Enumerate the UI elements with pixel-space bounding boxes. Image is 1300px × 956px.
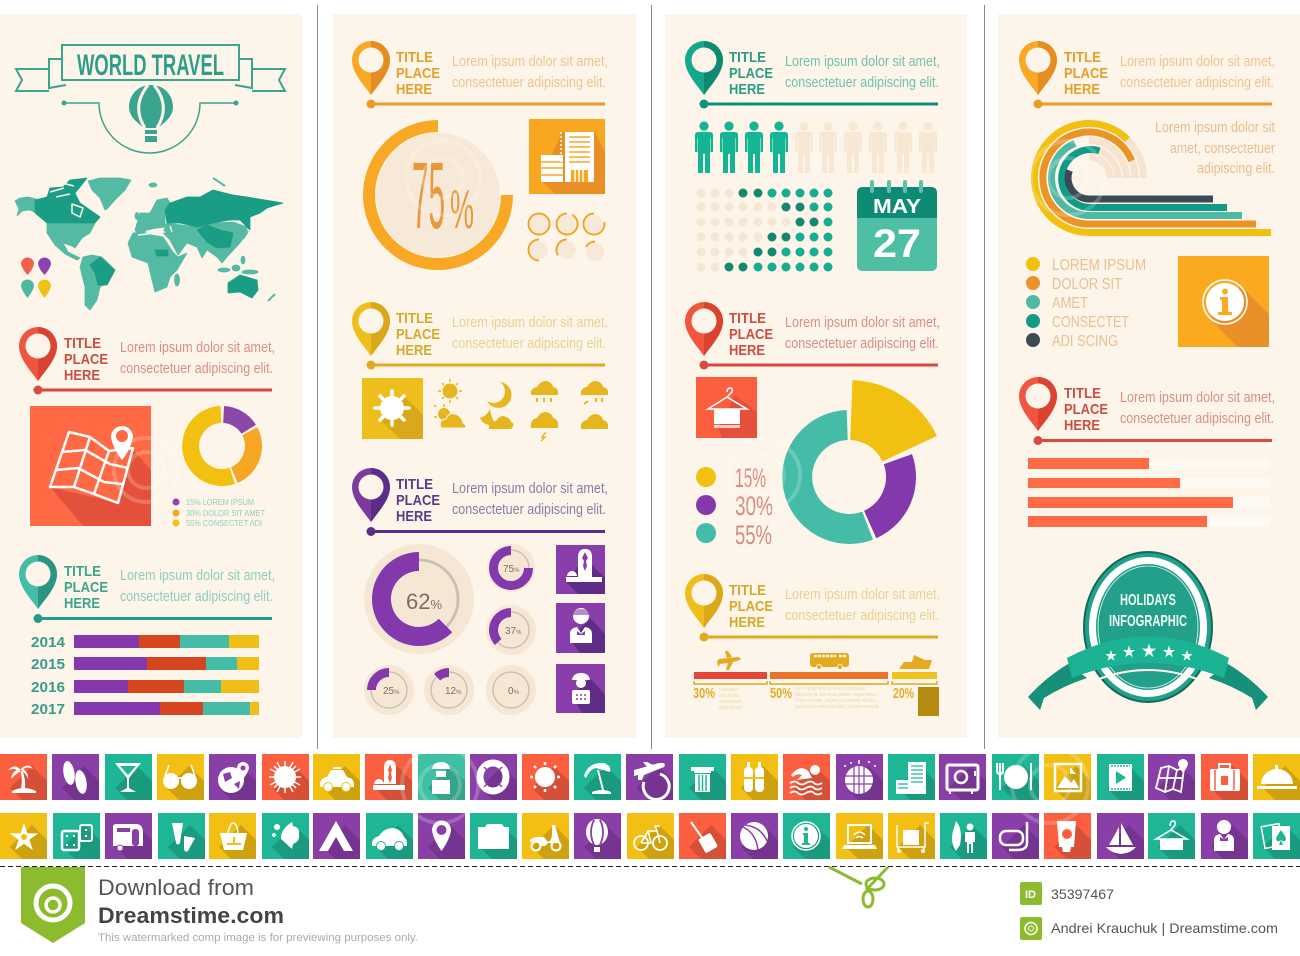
- icon: plane loop: [626, 754, 673, 800]
- text block: right aligned: adipiscing elit.: [1197, 160, 1275, 177]
- transport share chart: 50%: [770, 685, 792, 702]
- icon: ship: [899, 655, 932, 669]
- icon: map: [1148, 754, 1195, 800]
- donut: 37%: 37%: [505, 626, 522, 637]
- header: teal title: HERE: [729, 81, 765, 98]
- icon: beach bag: [209, 813, 256, 859]
- legend: radial chart: CONSECTET: [1052, 314, 1129, 331]
- icon: globe with pin: [209, 754, 256, 800]
- icon: palm island: [0, 754, 47, 800]
- header: orange title: consectetuer adipiscing elit.: [452, 74, 606, 91]
- icon: car: [366, 813, 413, 859]
- text block: right aligned: Lorem ipsum dolor sit: [1155, 119, 1276, 136]
- icon: bicycle: [627, 813, 674, 859]
- icon: playing cards: [1253, 813, 1300, 859]
- donut chart: map: [191, 414, 253, 477]
- header: red title: consectetuer adipiscing elit.: [1120, 410, 1274, 427]
- transport share chart: purus lectus malesuada libero, sit amet commodo: [795, 704, 879, 710]
- header: teal title: Lorem ipsum dolor sit amet,: [120, 567, 275, 584]
- header: teal title: [19, 555, 275, 623]
- icon: plate and cutlery: [992, 754, 1039, 800]
- icon: info tile: [1178, 256, 1269, 347]
- world map: [15, 178, 283, 310]
- icon: flippers: [158, 813, 205, 859]
- header: teal title: PLACE: [64, 579, 108, 596]
- icon: suitcase: [1201, 754, 1248, 800]
- donut legend: 15% LOREM IPSUM: [186, 498, 254, 507]
- footer: download banner: Dreamstime.com: [98, 903, 284, 928]
- header: red title: HERE: [1064, 417, 1100, 434]
- icon: bus: [810, 653, 849, 670]
- header: teal title: consectetuer adipiscing elit.: [120, 588, 273, 605]
- stacked bar chart: years: 2014: [31, 634, 66, 651]
- dot matrix chart: [696, 188, 832, 272]
- header: red title: HERE: [64, 367, 100, 384]
- panel: statistics and badge: [998, 14, 1300, 738]
- header: yellow title: PLACE: [729, 598, 773, 615]
- donut: 37%: [486, 605, 536, 655]
- legend: percentages: 30%: [735, 491, 773, 521]
- header: teal title: PLACE: [729, 65, 773, 82]
- footer: image id: ID: [1025, 889, 1036, 901]
- footer: author credit: Andrei Krauchuk | Dreamstime.com: [1051, 920, 1278, 936]
- icon: camera: [470, 813, 517, 859]
- header: red title: PLACE: [729, 326, 773, 343]
- header: orange title: TITLE: [1064, 49, 1101, 66]
- icon: picture: [1044, 754, 1091, 800]
- transport share chart: Lorem ipsum dolor sit amet, consectetuer: [795, 686, 865, 692]
- icon: info: [783, 813, 830, 859]
- panel: world travel: [0, 14, 302, 738]
- badge: holidays infographic: HOLIDAYS: [1120, 592, 1176, 609]
- icon: column: [679, 754, 726, 800]
- icon: tent: [313, 813, 360, 859]
- legend pins: [21, 258, 51, 298]
- icon: cloche: [1253, 754, 1300, 800]
- donut: 62%: 62%: [406, 589, 442, 614]
- header: orange title: Lorem ipsum dolor sit amet,: [452, 53, 608, 70]
- icon: film: [1097, 754, 1144, 800]
- donut: 62%: [364, 544, 474, 654]
- icon: receptionist: [365, 754, 412, 800]
- badge: holidays infographic: [1028, 551, 1268, 710]
- donut: 75%: 75%: [503, 564, 520, 575]
- text block: right aligned: [1155, 119, 1276, 177]
- donut: 75%: [487, 544, 535, 592]
- header: yellow title: PLACE: [396, 326, 440, 343]
- footer: download banner: This watermarked comp image is for previewing purposes only.: [98, 932, 418, 944]
- donut: 12%: [424, 665, 474, 715]
- header: red title: HERE: [729, 342, 765, 359]
- donut: 12%: 12%: [445, 686, 462, 697]
- transport share chart: 30%: [693, 685, 715, 702]
- panel: hotels and weather: [333, 14, 636, 738]
- donut legend: 55% CONSECTET ADI: [186, 519, 262, 528]
- legend: radial chart: DOLOR SIT: [1052, 276, 1122, 293]
- header: yellow title: Lorem ipsum dolor sit amet,: [785, 586, 940, 603]
- icon: towel hanger: [1148, 813, 1195, 859]
- header: red title: PLACE: [1064, 401, 1108, 418]
- icon: starfish: [0, 813, 47, 859]
- icon: fish: [262, 813, 309, 859]
- icon: towel hanger tile: [696, 377, 757, 438]
- icon: swimmer: [783, 754, 830, 800]
- small progress rings: [528, 213, 604, 261]
- stacked bar chart: years: 2016: [31, 679, 65, 696]
- header: orange title: [352, 41, 608, 108]
- calendar: May 27: 27: [873, 222, 921, 266]
- icon: sun burst: [262, 754, 309, 800]
- icon: plane: [717, 651, 741, 670]
- header: purple title: consectetuer adipiscing elit.: [452, 501, 606, 518]
- icon strip: row 2: [0, 813, 1300, 859]
- donut legend: [172, 498, 265, 528]
- header: yellow title: Lorem ipsum dolor sit amet,: [452, 314, 608, 331]
- icon: buildings tile: [529, 119, 605, 194]
- icon: maid: [418, 754, 465, 800]
- header: red title: [1019, 377, 1275, 445]
- header: purple title: Lorem ipsum dolor sit amet,: [452, 480, 608, 497]
- badge: holidays infographic: INFOGRAPHIC: [1109, 613, 1187, 630]
- text block: right aligned: amet, consectetuer: [1170, 140, 1275, 157]
- icon: folded map tile: [30, 406, 151, 526]
- calendar: May 27: [857, 180, 937, 271]
- people pictogram: [695, 122, 937, 173]
- transport share chart: [693, 651, 939, 716]
- icon: diving mask: [992, 813, 1039, 859]
- icon: laptop: [836, 813, 883, 859]
- header: yellow title: HERE: [729, 614, 765, 631]
- header: purple title: TITLE: [396, 476, 433, 493]
- header: red title: TITLE: [729, 310, 766, 327]
- legend: radial chart: [1026, 257, 1146, 350]
- icon: safe: [939, 754, 986, 800]
- icon: maid tile: [556, 664, 605, 713]
- legend: radial chart: LOREM IPSUM: [1052, 257, 1146, 274]
- icon: flip flops: [52, 754, 99, 800]
- progress ring: 75%: 75: [412, 143, 445, 249]
- icon: balloon: [574, 813, 621, 859]
- legend: percentages: 15%: [735, 463, 766, 493]
- legend: radial chart: ADI SCING: [1052, 333, 1118, 350]
- icon: disco ball: [836, 754, 883, 800]
- header: orange title: PLACE: [396, 65, 440, 82]
- exploded donut chart: [782, 380, 937, 544]
- header: red title: [685, 302, 940, 370]
- header: orange title: PLACE: [1064, 65, 1108, 82]
- title banner: world travel: WORLD TRAVEL: [77, 49, 224, 82]
- icon: dice: [53, 813, 100, 859]
- footer: image id: [1020, 882, 1114, 905]
- icon: buildings: [888, 754, 935, 800]
- icon: location pin: [418, 813, 465, 859]
- stacked bar chart: years: [31, 634, 259, 718]
- transport share chart: Lorem ipsum: [719, 687, 739, 693]
- header: orange title: TITLE: [396, 49, 433, 66]
- legend: radial chart: AMET: [1052, 295, 1088, 312]
- icon: scooter: [522, 813, 569, 859]
- stacked bar chart: years: 2017: [31, 701, 65, 718]
- header: purple title: [352, 468, 608, 536]
- footer: image id: 35397467: [1051, 886, 1114, 902]
- icon: sunglasses: [157, 754, 204, 800]
- icon: scissors: [829, 867, 888, 907]
- donut legend: 30% DOLOR SIT AMET: [186, 509, 265, 518]
- header: orange title: [1019, 41, 1275, 108]
- icon: luggage trolley: [888, 813, 935, 859]
- icon: cocktail: [105, 754, 152, 800]
- icon: sun: [522, 754, 569, 800]
- header: yellow title: consectetuer adipiscing elit.: [452, 335, 606, 352]
- icon: dreamstime ribbon: [21, 867, 85, 943]
- header: red title: TITLE: [64, 335, 101, 352]
- donut: 25%: 25%: [383, 686, 400, 697]
- donut: 25%: [364, 665, 414, 715]
- header: orange title: HERE: [1064, 81, 1100, 98]
- transport share chart: Fusce posuere, magna sed pulvinar ultricies,: [795, 698, 877, 704]
- header: red title: TITLE: [1064, 385, 1101, 402]
- icon: taxi: [313, 754, 360, 800]
- header: teal title: Lorem ipsum dolor sit amet,: [785, 53, 940, 70]
- progress ring: 75%: %: [450, 178, 474, 240]
- icon: luggage: [679, 813, 726, 859]
- header: yellow title: [352, 302, 608, 370]
- legend: percentages: 55%: [735, 520, 772, 550]
- icon: waiter tile: [556, 603, 605, 653]
- header: orange title: Lorem ipsum dolor sit amet,: [1120, 53, 1275, 70]
- icon strip: row 1: [0, 754, 1300, 800]
- icon: waiter: [1201, 813, 1248, 859]
- calendar: May 27: MAY: [873, 196, 922, 218]
- donut: 0%: [486, 665, 536, 715]
- icon: receptionist tile: [556, 545, 605, 594]
- icon: beach ball: [731, 813, 778, 859]
- icon: sailboat: [1097, 813, 1144, 859]
- header: red title: consectetuer adipiscing elit.: [785, 335, 939, 352]
- transport share chart: 20%: [893, 685, 914, 702]
- header: purple title: PLACE: [396, 492, 440, 509]
- icon: sun tile: [362, 378, 423, 439]
- header: orange title: consectetuer adipiscing elit.: [1120, 74, 1274, 91]
- header: teal title: HERE: [64, 595, 100, 612]
- footer: author credit: [1020, 917, 1278, 940]
- legend: percentages: [696, 463, 773, 550]
- icon: sunscreen: [1044, 813, 1091, 859]
- title banner: world travel: [16, 45, 285, 91]
- header: yellow title: consectetuer adipiscing elit.: [785, 607, 939, 624]
- header: yellow title: [685, 574, 940, 642]
- header: orange title: HERE: [396, 81, 432, 98]
- progress ring: 75%: [369, 126, 507, 264]
- transport share chart: dolor sit amet: [719, 693, 739, 699]
- icon: beach umbrella: [574, 754, 621, 800]
- transport share chart: adipiscing elit. Maecenas porttitor congue massa.: [795, 692, 877, 698]
- icon: balloon emblem: [62, 85, 238, 153]
- icon: scuba tanks: [731, 754, 778, 800]
- header: yellow title: HERE: [396, 342, 432, 359]
- header: purple title: HERE: [396, 508, 432, 525]
- transport share chart: consectetuer: [719, 699, 741, 705]
- transport share chart: adipiscing elit: [719, 705, 741, 711]
- footer: download banner: [21, 867, 418, 944]
- donut: 0%: 0%: [508, 686, 520, 697]
- radial bar chart: [1034, 124, 1271, 233]
- icon: surfer: [940, 813, 987, 859]
- header: teal title: consectetuer adipiscing elit.: [785, 74, 939, 91]
- header: red title: PLACE: [64, 351, 108, 368]
- icon: caravan: [105, 813, 152, 859]
- horizontal bar chart: [1028, 458, 1270, 527]
- header: teal title: [685, 41, 940, 108]
- header: red title: Lorem ipsum dolor sit amet,: [1120, 389, 1275, 406]
- icon: lifebuoy: [470, 754, 517, 800]
- header: teal title: TITLE: [64, 563, 101, 580]
- header: yellow title: TITLE: [729, 582, 766, 599]
- header: yellow title: TITLE: [396, 310, 433, 327]
- header: red title: [19, 327, 275, 394]
- header: red title: consectetuer adipiscing elit.: [120, 360, 273, 377]
- panel: people and transport: [665, 14, 967, 738]
- header: red title: Lorem ipsum dolor sit amet,: [785, 314, 940, 331]
- stacked bar chart: years: 2015: [31, 656, 65, 673]
- weather icons: [434, 379, 608, 441]
- footer: download banner: Download from: [98, 875, 254, 900]
- header: teal title: TITLE: [729, 49, 766, 66]
- header: red title: Lorem ipsum dolor sit amet,: [120, 339, 275, 356]
